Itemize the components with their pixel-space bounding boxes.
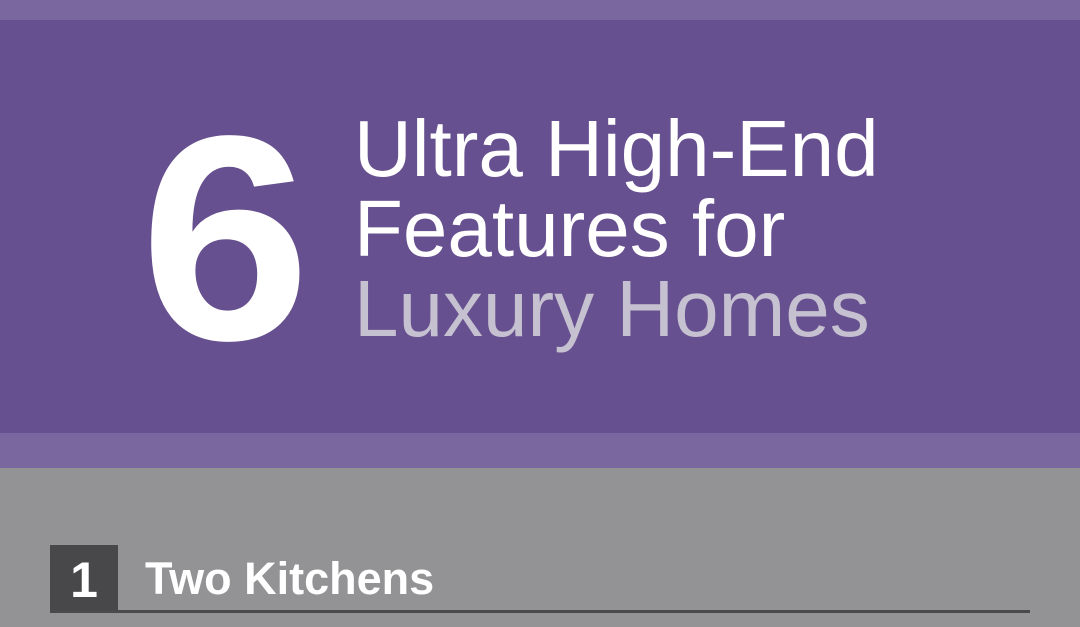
section heading: Two Kitchens [50,545,1030,613]
header main panel [0,20,1080,433]
big number 6: 6 [140,75,311,401]
title line 3: Luxury Homes [354,264,870,353]
header band [0,0,1080,468]
title [354,104,879,353]
title line 2: Features for [354,184,785,273]
number box 1: 1 [70,552,98,608]
heading text: Two Kitchens [145,553,434,604]
title line 1: Ultra High-End [354,104,879,193]
number box 1 [50,545,118,613]
